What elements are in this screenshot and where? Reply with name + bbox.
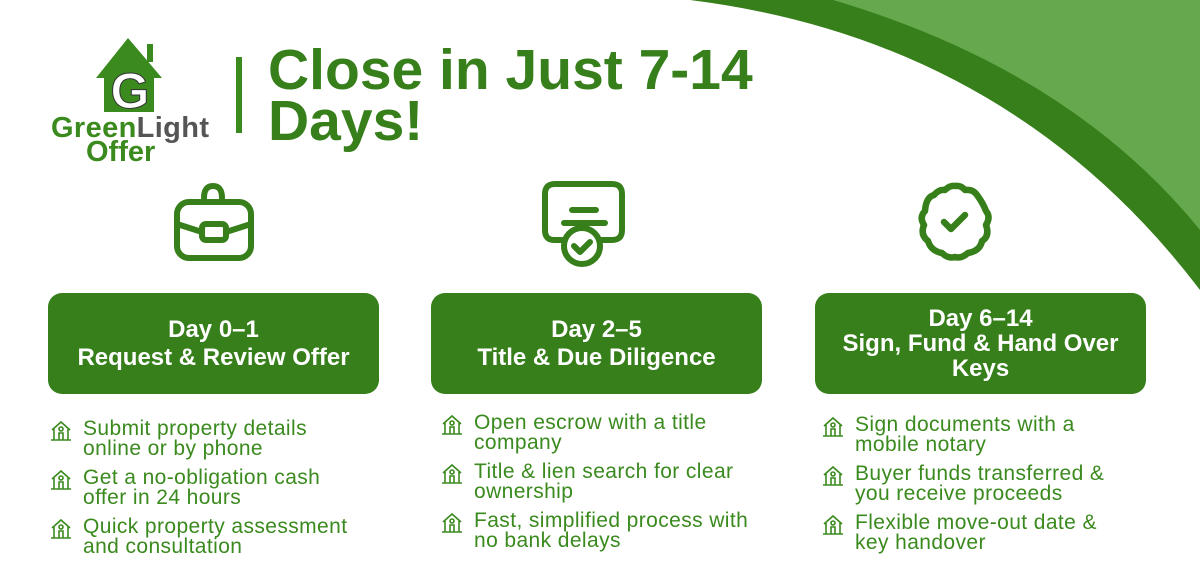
list: column 2 (442, 411, 748, 552)
box: day 0-1 (48, 293, 379, 394)
list: column 3: you receive proceeds (855, 482, 1063, 505)
list: column 3: Sign documents with a (855, 413, 1075, 436)
box: day 2-5: Title & Due Diligence (477, 344, 716, 370)
list: column 2: no bank delays (474, 529, 621, 552)
list: column 2: ownership (474, 480, 573, 503)
box: day 0-1: Request & Review Offer (77, 344, 350, 370)
list: column 3 (823, 413, 1104, 554)
divider bar (236, 57, 242, 133)
list: column 2: company (474, 431, 562, 454)
title: Days! (268, 89, 423, 153)
box: day 6-14: Day 6–14 (928, 305, 1033, 332)
list: column 1: offer in 24 hours (83, 486, 241, 509)
logo: GreenLight (51, 112, 209, 144)
icon: briefcase (174, 183, 254, 261)
list: column 1: online or by phone (83, 437, 263, 460)
list: column 1: Submit property details (83, 417, 307, 440)
list: column 2: Title & lien search for clear (474, 460, 733, 483)
box: day 2-5: Day 2–5 (551, 316, 642, 342)
box: day 6-14: Sign, Fund & Hand Over (842, 330, 1118, 357)
logo: G (111, 63, 149, 119)
list: column 1 (51, 417, 347, 558)
list: column 2: Open escrow with a title (474, 411, 707, 434)
box: day 0-1: Day 0–1 (168, 316, 259, 342)
list: column 1: and consultation (83, 535, 242, 558)
box: day 6-14: Keys (952, 355, 1009, 382)
title: Close in Just 7-14 (268, 38, 753, 102)
title (268, 38, 753, 153)
icon: certificate (542, 181, 625, 267)
icon: badge check (918, 182, 992, 261)
list: column 3: key handover (855, 531, 986, 554)
box: day 6-14 (815, 293, 1146, 394)
list: column 1: Get a no-obligation cash (83, 466, 320, 489)
list: column 3: Flexible move-out date & (855, 511, 1097, 534)
list: column 2: Fast, simplified process with (474, 509, 748, 532)
list: column 1: Quick property assessment (83, 515, 347, 538)
list: column 3: mobile notary (855, 433, 986, 456)
logo (51, 38, 209, 162)
box: day 2-5 (431, 293, 762, 394)
list: column 3: Buyer funds transferred & (855, 462, 1104, 485)
